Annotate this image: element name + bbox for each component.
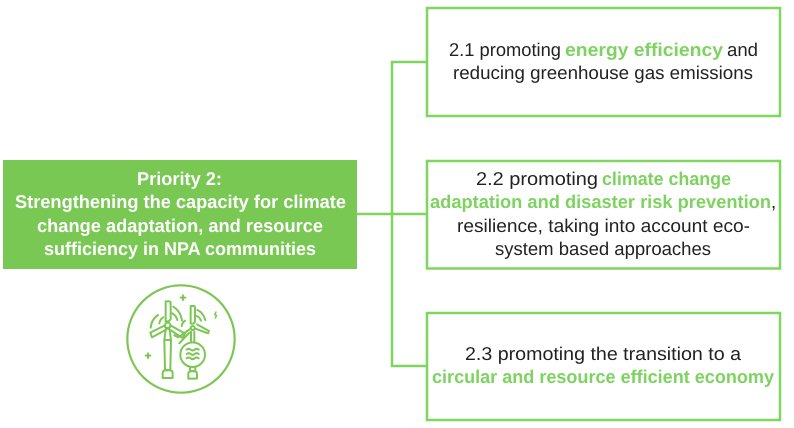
text: 2.1: and xyxy=(727,39,758,60)
text: 2.2: climate change xyxy=(602,168,731,189)
priority heading text: change adaptation, and resource xyxy=(37,215,323,236)
text: 2.2: system based approaches xyxy=(495,238,711,259)
text: 2.1: reducing greenhouse gas emissions xyxy=(453,62,753,83)
priority heading text: Priority 2: xyxy=(137,168,222,189)
panel: priority 2 xyxy=(3,160,357,269)
text: 2.2: , xyxy=(771,191,776,212)
panel: 2.3 circular economy xyxy=(427,313,780,420)
panel: 2.2 climate adaptation xyxy=(427,161,780,268)
text: 2.2: 2.2 promoting xyxy=(476,168,598,189)
text: 2.2 xyxy=(430,168,776,259)
panel: 2.1 energy efficiency xyxy=(427,8,780,116)
text: 2.3: circular and resource efficient economy xyxy=(432,366,775,387)
priority heading text: sufficiency in NPA communities xyxy=(44,238,316,259)
text: 2.1 xyxy=(449,39,758,83)
text: 2.1: energy efficiency xyxy=(565,39,724,60)
icon: wind turbines and energy xyxy=(127,285,235,393)
connector lines xyxy=(357,62,427,366)
text: 2.2: resilience, taking into account eco- xyxy=(457,215,750,236)
text: 2.3 xyxy=(432,343,775,387)
text: 2.2: adaptation and disaster risk prevention xyxy=(430,191,771,212)
priority heading text: Strengthening the capacity for climate xyxy=(15,191,346,212)
text: 2.1: 2.1 promoting xyxy=(449,39,561,60)
priority heading text xyxy=(15,168,346,259)
text: 2.3: 2.3 promoting the transition to a xyxy=(465,343,742,364)
